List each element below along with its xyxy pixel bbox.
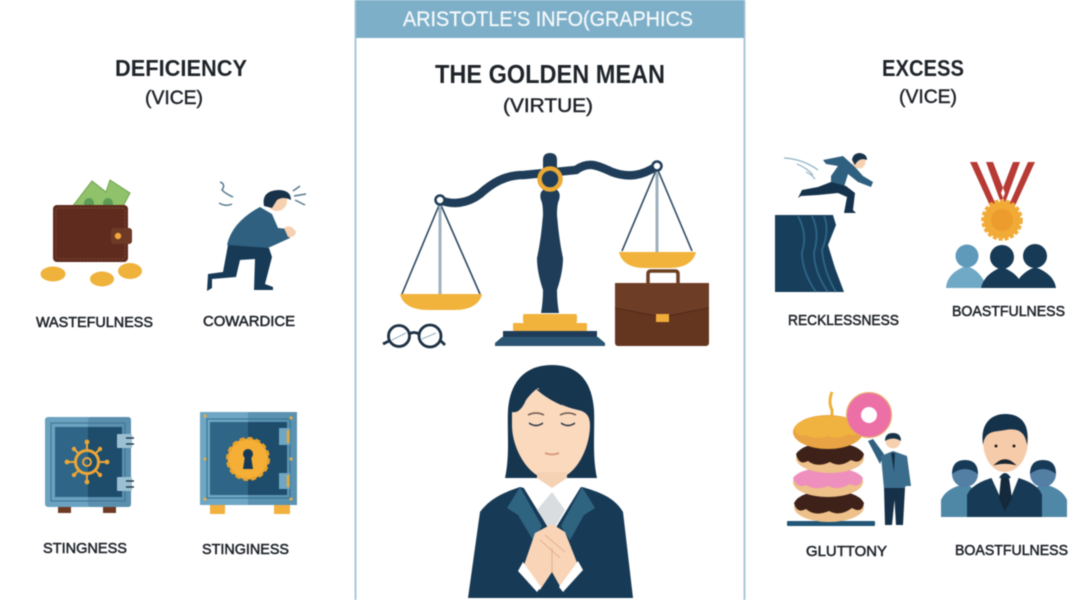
label: boastfulness: BOASTFULNESS xyxy=(952,303,1065,320)
icon: safe with keyhole xyxy=(200,412,297,514)
icon: donut stack and man xyxy=(787,392,911,526)
label: boastfulness: BOASTFULNESS xyxy=(955,542,1068,559)
icon: briefcase xyxy=(615,271,709,346)
subheading: vice: (VICE) xyxy=(899,87,957,108)
subheading: vice: (VICE) xyxy=(145,88,203,109)
subheading: virtue: (VIRTUE) xyxy=(503,96,593,117)
label: stinginess: STINGINESS xyxy=(202,541,289,558)
label: cowardice: COWARDICE xyxy=(203,313,295,330)
label: recklessness: RECKLESSNESS xyxy=(788,312,899,329)
label: stingness: STINGNESS xyxy=(43,540,127,557)
panel: excess xyxy=(775,55,1068,560)
icon: boastful man with followers xyxy=(941,414,1067,517)
icon: glasses xyxy=(383,325,445,347)
icon: balance scales xyxy=(400,153,696,346)
label: gluttony: GLUTTONY xyxy=(806,543,887,560)
heading: deficiency: DEFICIENCY xyxy=(115,55,247,81)
heading: excess: EXCESS xyxy=(882,55,964,81)
panel: the golden mean xyxy=(355,0,745,600)
icon: safe with wheel xyxy=(45,417,134,513)
icon: meditating woman xyxy=(468,365,633,598)
header banner xyxy=(356,0,744,38)
icon: wallet with cash and coins xyxy=(40,180,142,286)
icon: medal and audience xyxy=(946,162,1056,288)
heading: the golden mean: THE GOLDEN MEAN xyxy=(435,59,665,89)
icon: man leaping off cliff xyxy=(775,153,873,292)
header banner: ARISTOTLE’S INFO(GRAPHICS xyxy=(403,8,693,31)
panel: deficiency xyxy=(36,55,306,558)
label: wastefulness: WASTEFULNESS xyxy=(36,314,153,331)
icon: cowering man xyxy=(207,182,306,291)
